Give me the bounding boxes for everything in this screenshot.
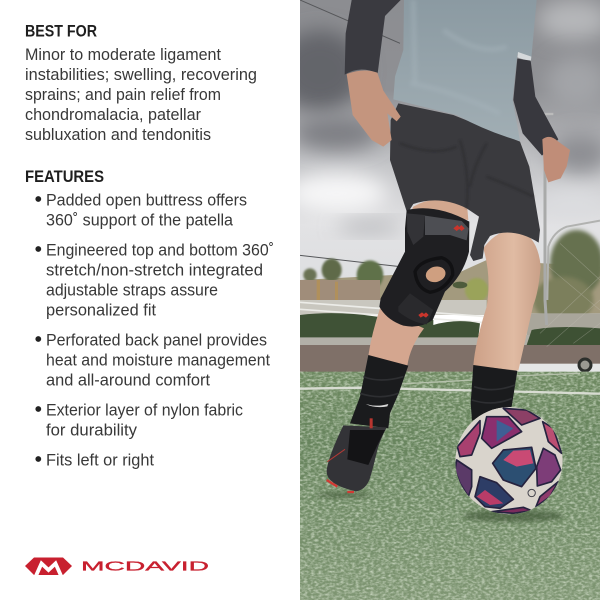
text block: best for description: instabilities; swelling, recovering bbox=[25, 66, 257, 84]
player: thigh above brace bbox=[410, 200, 468, 220]
sock check mark bbox=[366, 404, 388, 407]
ball panels bbox=[455, 408, 562, 513]
player: right hand bbox=[542, 137, 570, 182]
text block: best for description bbox=[25, 46, 257, 144]
brace mesh panel bbox=[407, 213, 425, 245]
heading: features: FEATURES bbox=[25, 168, 104, 186]
feature: perforated back panel: Perforated back panel provides bbox=[46, 332, 267, 350]
shirt cuff bbox=[517, 52, 531, 62]
knee brace bbox=[379, 208, 469, 327]
player: left sock bbox=[350, 355, 408, 428]
feature: engineered straps bbox=[35, 242, 274, 320]
hedge and dirt bank bbox=[300, 313, 600, 373]
text block: best for description: subluxation and tendonitis bbox=[25, 126, 211, 144]
player: left sleeve bbox=[345, 0, 401, 75]
feature: nylon exterior: Exterior layer of nylon fabric bbox=[46, 402, 243, 420]
feature: engineered straps: stretch/non-stretch integrated bbox=[46, 262, 263, 280]
turf pitch bbox=[300, 372, 600, 600]
feature: padded buttress: 360˚ support of the patella bbox=[46, 212, 234, 230]
player: boot bbox=[327, 418, 387, 492]
upper strap logo bbox=[453, 225, 465, 231]
lower strap logo bbox=[418, 312, 429, 318]
soccer ball bbox=[455, 407, 563, 514]
feature: fits left or right: Fits left or right bbox=[46, 452, 154, 470]
player: shorts bbox=[390, 103, 540, 261]
feature: nylon exterior bbox=[35, 402, 243, 440]
player: right sleeve bbox=[513, 59, 558, 156]
sky bbox=[300, 0, 600, 280]
upper strap bbox=[425, 216, 469, 240]
icon: McDavid M mark bbox=[25, 558, 72, 575]
feature: engineered straps: personalized fit bbox=[46, 302, 156, 320]
player: shirt bbox=[393, 0, 537, 141]
goal post and netting bbox=[540, 113, 600, 371]
player: right leg bbox=[473, 228, 541, 371]
shirt highlights bbox=[412, 3, 414, 18]
shorts folds bbox=[400, 140, 533, 208]
feature: padded buttress bbox=[35, 192, 247, 230]
feature: nylon exterior: for durability bbox=[46, 422, 138, 440]
player: right sock bbox=[471, 365, 517, 421]
feature: perforated back panel bbox=[35, 332, 270, 390]
text block: best for description: sprains; and pain relief from bbox=[25, 86, 221, 104]
text block: best for description: Minor to moderate ligament bbox=[25, 46, 221, 64]
buttress surround bbox=[415, 258, 453, 292]
logo: McDavid bbox=[25, 558, 208, 575]
player: left lower leg bbox=[368, 308, 424, 366]
feature: perforated back panel: heat and moisture management bbox=[46, 352, 270, 370]
text panel bbox=[25, 25, 273, 575]
feature: perforated back panel: and all-around comfort bbox=[46, 372, 210, 390]
panel: action photo bbox=[277, 0, 600, 600]
wordmark: MCDAVID bbox=[81, 560, 209, 574]
panel artwork bbox=[503, 450, 533, 467]
player: left hand bbox=[347, 70, 401, 147]
lower strap bbox=[398, 293, 433, 324]
heading: best for: BEST FOR bbox=[25, 22, 97, 40]
feature: engineered straps: Engineered top and bottom 360˚ bbox=[46, 242, 274, 260]
feature: engineered straps: adjustable straps assure bbox=[46, 282, 218, 300]
background trees and hills bbox=[300, 230, 600, 323]
text block: best for description: chondromalacia, patellar bbox=[25, 106, 201, 124]
feature: padded buttress: Padded open buttress offers bbox=[46, 192, 247, 210]
patella opening bbox=[424, 264, 447, 284]
